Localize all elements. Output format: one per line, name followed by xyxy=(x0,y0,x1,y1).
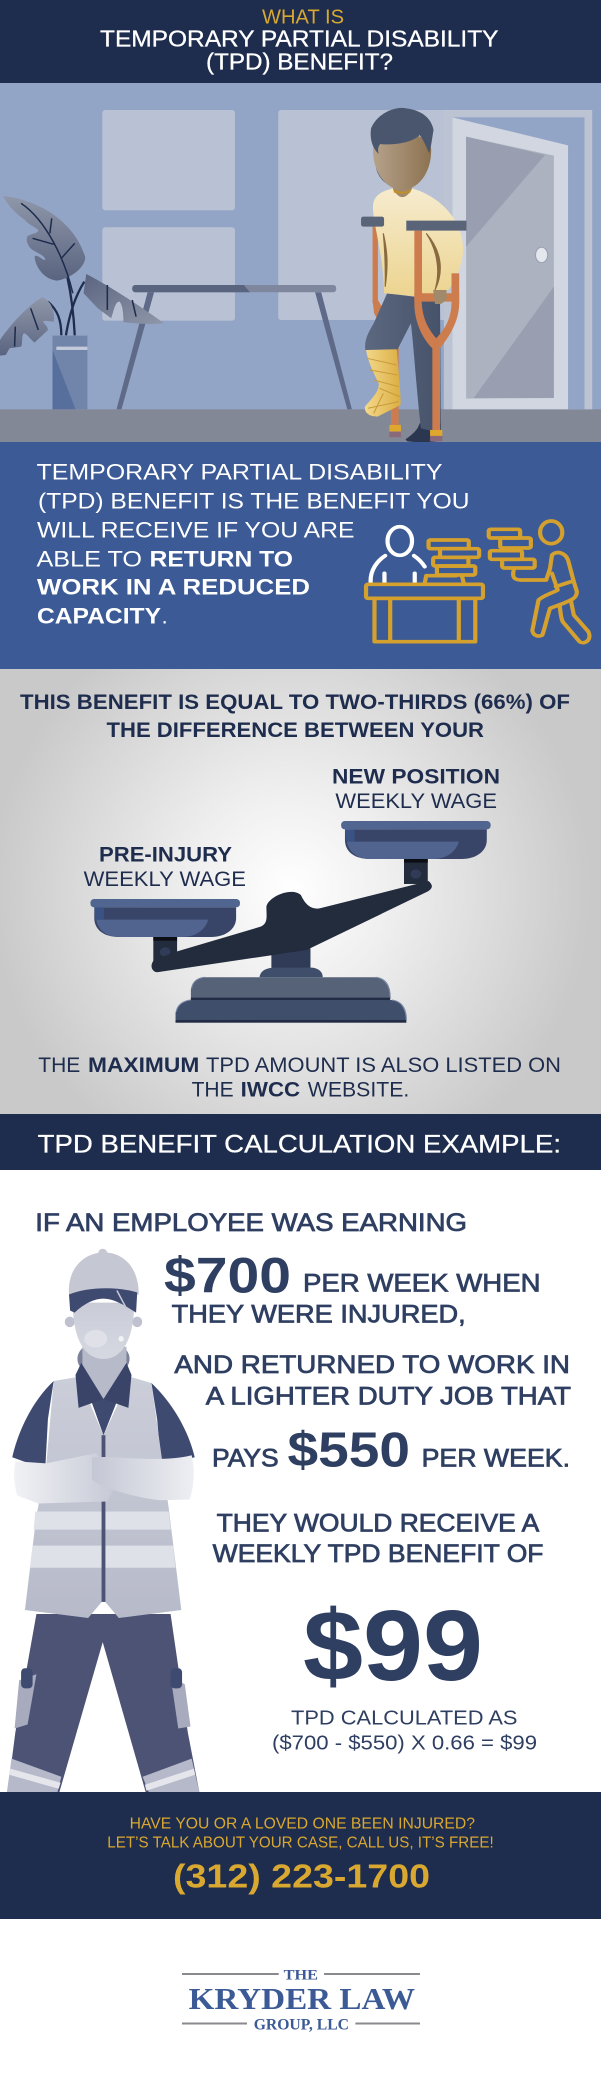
heading: two-thirds: THE DIFFERENCE BETWEEN YOUR xyxy=(106,718,484,742)
hair behind xyxy=(376,138,428,188)
text: earning: PER WEEK WHEN xyxy=(303,1270,540,1298)
footer call to action xyxy=(0,1792,601,1919)
text: earning: IF AN EMPLOYEE WAS EARNING xyxy=(35,1209,467,1237)
trousers xyxy=(365,293,441,433)
title: (TPD) BENEFIT? xyxy=(206,49,393,75)
neck xyxy=(393,183,412,199)
label: new position: NEW POSITION xyxy=(332,765,500,788)
text: returned to work xyxy=(174,1351,571,1478)
icon: balance scale xyxy=(90,821,491,1023)
definition text: ABLE TO xyxy=(36,546,142,571)
formula: TPD CALCULATED AS xyxy=(291,1708,518,1730)
note: maximum amount: WEBSITE. xyxy=(308,1079,409,1102)
scene: man on crutches in an office xyxy=(0,83,601,443)
label: pre-injury: PRE-INJURY xyxy=(99,843,232,866)
note: maximum amount: TPD AMOUNT IS ALSO LISTED ON xyxy=(206,1054,561,1077)
text: would receive xyxy=(213,1510,543,1568)
hair xyxy=(371,108,434,154)
text: earning xyxy=(35,1209,541,1329)
logo: The Kryder Law Group, LLC xyxy=(182,1967,420,2033)
shoe xyxy=(406,423,441,442)
table xyxy=(117,285,352,409)
far crutch xyxy=(373,227,401,437)
note: maximum amount xyxy=(38,1054,561,1102)
icon: office worker at desk and worker carrying papers xyxy=(366,521,589,643)
panel: benefit explanation with scale xyxy=(0,669,601,1114)
formula xyxy=(272,1708,537,1754)
call to action text xyxy=(107,1815,494,1851)
heading band: calculation example: TPD BENEFIT CALCULATION EXAMPLE: xyxy=(38,1130,561,1158)
head xyxy=(373,133,431,190)
definition text: WORK IN A REDUCED xyxy=(37,574,310,599)
call to action text: HAVE YOU OR A LOVED ONE BEEN INJURED? xyxy=(130,1815,475,1832)
definition text: CAPACITY xyxy=(37,603,161,628)
logo: The Kryder Law Group, LLC: KRYDER LAW xyxy=(189,1981,415,2016)
call to action text: LET’S TALK ABOUT YOUR CASE, CALL US, IT’S FREE! xyxy=(107,1834,494,1851)
text: returned to work: AND RETURNED TO WORK IN xyxy=(174,1351,570,1379)
definition text: (TPD) BENEFIT IS THE BENEFIT YOU xyxy=(38,488,470,513)
eyebrow: what is: WHAT IS xyxy=(262,6,344,28)
definition text: RETURN TO xyxy=(150,546,293,571)
label: pre-injury xyxy=(84,843,246,891)
note: maximum amount: THE xyxy=(38,1054,80,1077)
definition text xyxy=(36,459,470,628)
note: maximum amount: THE xyxy=(192,1079,234,1102)
big number: $99: $99 xyxy=(303,1590,483,1702)
logo: The Kryder Law Group, LLC: THE xyxy=(284,1967,318,1983)
label: new position xyxy=(332,765,500,813)
leg cast xyxy=(365,349,401,417)
heading: two-thirds xyxy=(20,690,570,742)
text: returned to work: PER WEEK. xyxy=(422,1444,570,1472)
illustration: construction worker xyxy=(7,1249,199,1792)
near crutch xyxy=(406,221,466,441)
heading: two-thirds: THIS BENEFIT IS EQUAL TO TWO-THIRDS (66%) OF xyxy=(20,690,570,714)
door xyxy=(444,110,592,409)
definition text: . xyxy=(162,603,168,628)
plant xyxy=(0,196,164,409)
text: returned to work: PAYS xyxy=(212,1444,279,1472)
title: TEMPORARY PARTIAL DISABILITY xyxy=(100,26,498,52)
text: would receive: WEEKLY TPD BENEFIT OF xyxy=(213,1540,543,1568)
label: new position: WEEKLY WAGE xyxy=(335,790,497,813)
text: returned to work: A LIGHTER DUTY JOB THAT xyxy=(206,1383,571,1411)
definition text: TEMPORARY PARTIAL DISABILITY xyxy=(36,459,443,484)
panel: definition xyxy=(0,442,601,669)
text: earning: THEY WERE INJURED, xyxy=(172,1301,466,1329)
panel: calculation example xyxy=(0,1170,601,1792)
phone number: (312) 223-1700 xyxy=(173,1857,430,1894)
label: pre-injury: WEEKLY WAGE xyxy=(84,868,246,891)
man xyxy=(361,108,466,442)
formula: ($700 - $550) X 0.66 = $99 xyxy=(272,1732,537,1754)
text: would receive: THEY WOULD RECEIVE A xyxy=(217,1510,540,1538)
header band xyxy=(0,0,601,83)
note: maximum amount: IWCC xyxy=(241,1079,300,1102)
title xyxy=(100,26,498,75)
sweater xyxy=(373,188,463,298)
text: earning: $700 xyxy=(164,1248,291,1304)
text: returned to work: $550 xyxy=(288,1424,410,1478)
heading band: calculation example xyxy=(0,1114,601,1170)
definition text: WILL RECEIVE IF YOU ARE xyxy=(37,517,354,542)
far crutch handle xyxy=(361,217,384,227)
logo: The Kryder Law Group, LLC: GROUP, LLC xyxy=(254,2016,349,2033)
note: maximum amount: MAXIMUM xyxy=(88,1054,199,1077)
wall panels xyxy=(102,110,447,321)
